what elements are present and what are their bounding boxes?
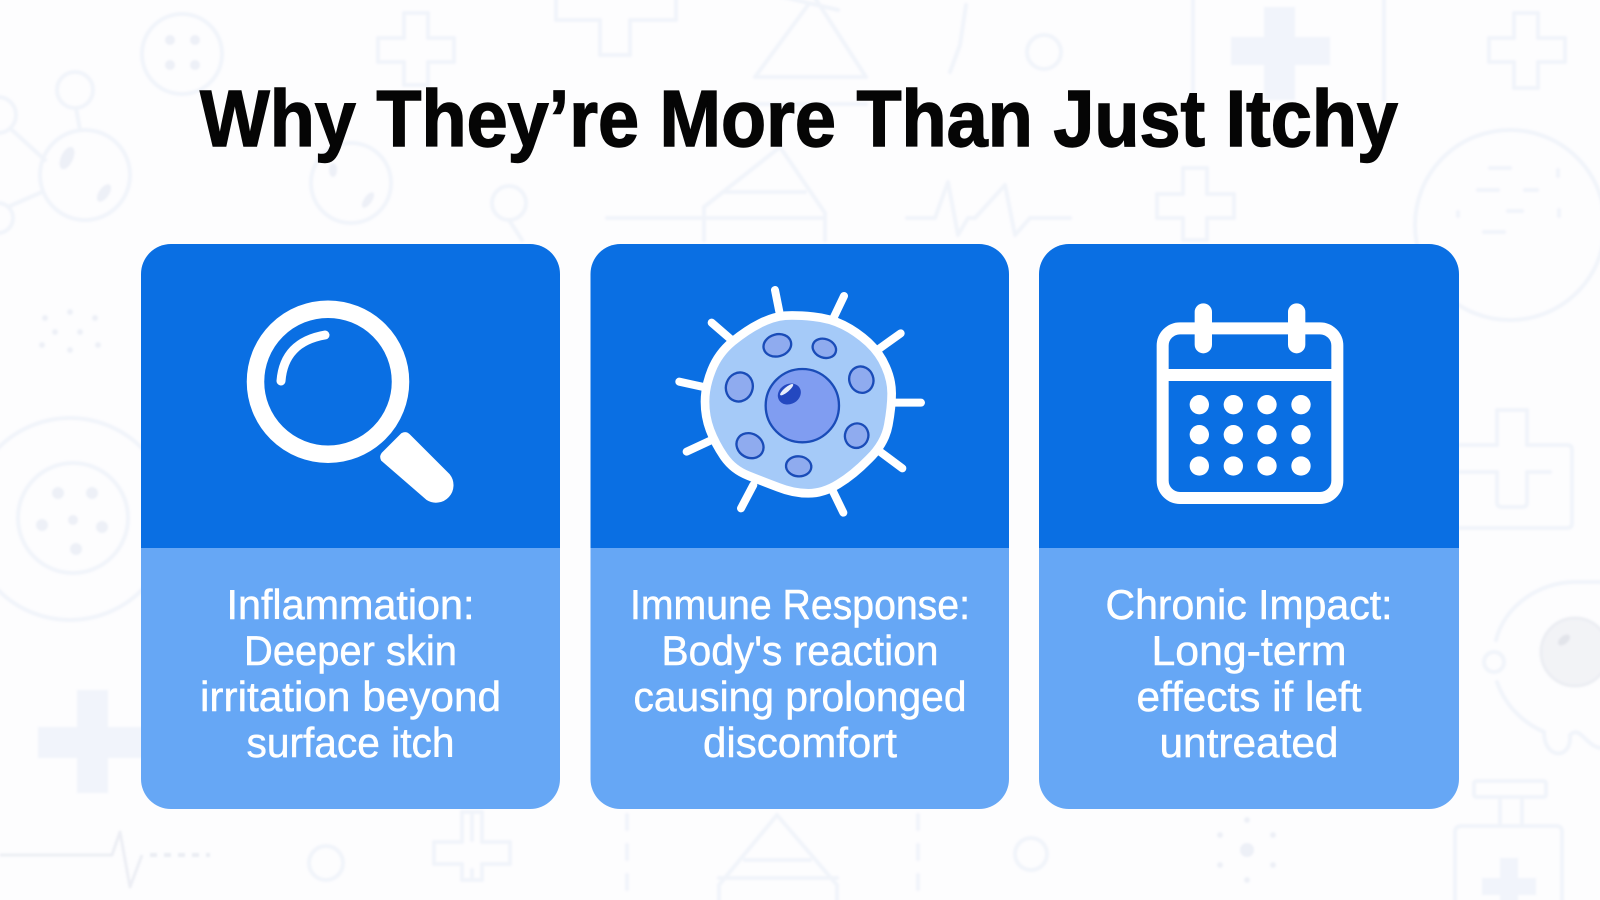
text: inflammation: surface itch <box>246 719 454 766</box>
text: chronic impact: Long-term <box>1152 627 1346 674</box>
text: chronic impact: effects if left <box>1136 673 1362 720</box>
icon: magnifying glass <box>256 309 453 502</box>
card body <box>1039 548 1459 809</box>
text: immune response: discomfort <box>703 719 897 766</box>
card body <box>141 548 560 809</box>
text: chronic impact <box>1106 581 1392 766</box>
card header <box>141 244 560 548</box>
text: immune response: Body's reaction <box>662 627 938 674</box>
icon: calendar <box>1163 312 1337 498</box>
card body <box>590 548 1009 809</box>
card header <box>1039 244 1459 548</box>
title: Why They’re More Than Just Itchy <box>200 74 1398 163</box>
panel: inflammation <box>141 244 560 809</box>
text: immune response: Immune Response: <box>630 581 970 628</box>
text: inflammation: Deeper skin <box>244 627 457 674</box>
text: immune response <box>630 581 970 766</box>
text: inflammation: irritation beyond <box>200 673 501 720</box>
text: inflammation: Inflammation: <box>226 581 474 628</box>
panel: immune response <box>590 244 1009 809</box>
text: immune response: causing prolonged <box>634 673 966 720</box>
card header <box>590 244 1009 548</box>
text: chronic impact: Chronic Impact: <box>1106 581 1392 628</box>
panel: chronic impact <box>1039 244 1459 809</box>
text: inflammation <box>200 581 501 766</box>
text: chronic impact: untreated <box>1160 719 1338 766</box>
icon: immune cell <box>679 290 921 513</box>
